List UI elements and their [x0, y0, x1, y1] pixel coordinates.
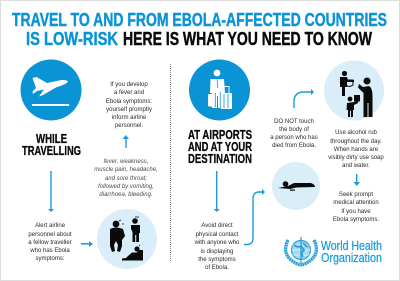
text: alcohol rub — [328, 129, 384, 169]
text: seek attention: if you have — [341, 208, 371, 215]
text: alert personnel — [28, 222, 73, 262]
text: alert personnel: a fellow traveller — [28, 239, 73, 246]
icon: traveller with luggage — [189, 60, 250, 120]
text: alcohol rub: and water. — [342, 162, 370, 169]
text: do not touch: a person who has — [270, 134, 318, 141]
title — [12, 10, 387, 49]
text: alcohol rub: When hands are — [334, 146, 379, 153]
text: do not touch: died from Ebola. — [272, 142, 316, 149]
arrow: down to seek attention — [354, 174, 360, 186]
text: symptoms list: fever, weakness, — [104, 158, 149, 165]
heading: while travelling — [22, 132, 81, 158]
text: avoid contact — [194, 222, 240, 271]
text: alert personnel: symptoms: — [35, 255, 65, 262]
arrow: curved to deceased circle — [244, 189, 265, 244]
logo: WHO wordmark: Organization — [321, 251, 382, 265]
heading: at airports — [188, 128, 252, 166]
text: avoid contact: the symptoms — [198, 256, 236, 263]
icon: deceased person circle — [272, 162, 320, 210]
text: alcohol rub: Use alcohol rub — [335, 129, 377, 136]
text: do not touch: the body of — [279, 126, 309, 133]
text: fever instruction: yourself promptly — [106, 106, 153, 113]
icon: symptoms circle — [97, 209, 157, 269]
logo: WHO wordmark: World Health — [321, 239, 382, 253]
text: symptoms list — [94, 158, 158, 198]
arrow: up to fever instruction — [122, 135, 129, 148]
text: fever instruction: Ebola symptoms: — [106, 98, 152, 105]
text: alcohol rub: visibly dirty use soap — [328, 154, 384, 161]
text: seek attention: Ebola symptoms. — [333, 216, 379, 223]
title: IS LOW-RISK — [26, 29, 118, 49]
text: seek attention: medical attention — [333, 199, 379, 206]
logo: WHO emblem — [286, 237, 316, 266]
arrow: down to avoid contact — [214, 171, 220, 212]
text: avoid contact: Avoid direct — [201, 222, 233, 229]
text: alert personnel: Alert airline — [35, 222, 65, 229]
text: fever instruction — [106, 81, 153, 129]
text: symptoms list: followed by vomiting, — [98, 183, 154, 190]
icon: hygiene circle — [324, 60, 384, 120]
heading: while travelling: WHILE — [36, 132, 67, 146]
text: alcohol rub: throughout the day. — [330, 138, 382, 145]
text: symptoms list: and sore throat; — [105, 175, 147, 182]
text: avoid contact: of Ebola. — [205, 264, 229, 271]
text: avoid contact: with anyone who — [194, 239, 240, 246]
icon: airplane departing — [20, 60, 82, 120]
divider — [170, 64, 172, 261]
heading: at airports: DESTINATION — [188, 152, 252, 166]
text: symptoms list: muscle pain, headache, — [94, 166, 158, 173]
arrow: to symptoms circle — [81, 241, 93, 247]
text: alert personnel: personnel about — [28, 231, 72, 238]
text: avoid contact: is displaying — [201, 248, 234, 255]
text: fever instruction: If you develop — [110, 81, 148, 88]
text: seek attention — [333, 191, 379, 223]
text: fever instruction: personnel. — [115, 122, 143, 129]
text: seek attention: Seek prompt — [339, 191, 373, 198]
heading: while travelling: TRAVELLING — [22, 144, 81, 158]
heading: at airports: AND AT YOUR — [188, 140, 252, 154]
text: do not touch: DO NOT touch — [274, 118, 314, 125]
text: alert personnel: who has Ebola — [29, 247, 70, 254]
logo: WHO wordmark — [321, 239, 382, 265]
arrow: down to alert text — [48, 171, 54, 212]
text: symptoms list: diarrhoea, bleeding. — [99, 191, 153, 198]
arrow: curved up to do not touch — [294, 89, 314, 108]
text: avoid contact: physical contact — [196, 231, 239, 238]
text: fever instruction: a fever and — [114, 89, 144, 96]
heading: at airports: AT AIRPORTS — [188, 128, 252, 142]
text: do not touch — [270, 118, 318, 149]
text: fever instruction: inform airline — [112, 114, 147, 121]
